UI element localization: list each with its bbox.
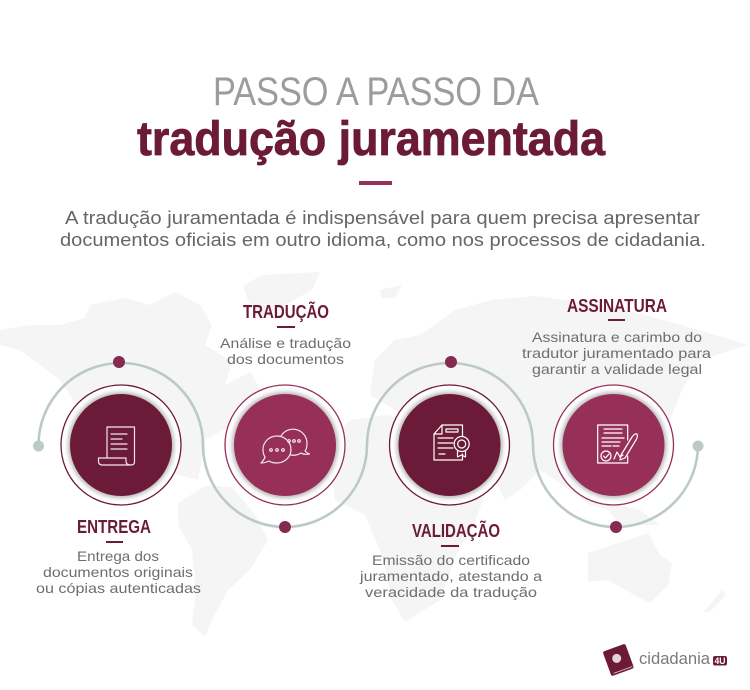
step: entrega: ou cópias autenticadas	[36, 580, 201, 596]
step: validação: veracidade da tradução	[365, 584, 537, 600]
title divider	[359, 181, 392, 185]
step: assinatura: tradutor juramentado para	[522, 345, 711, 361]
icon: signed document with pen	[598, 425, 637, 463]
step 1 circle	[61, 385, 181, 505]
step: entrega: documentos originais	[43, 564, 193, 580]
intro paragraph: documentos oficiais em outro idioma, como nos processos de cidadania.	[60, 230, 706, 250]
step: tradução: Análise e tradução	[220, 335, 351, 351]
step: tradução	[220, 301, 351, 367]
intro paragraph	[60, 208, 706, 250]
icon: scroll document	[98, 427, 134, 465]
title	[137, 70, 605, 166]
step 2 circle	[225, 385, 345, 505]
step 4 circle	[554, 385, 674, 505]
step: entrega	[36, 517, 201, 596]
logo: cidadania4u: 4U	[714, 656, 726, 666]
background world map	[0, 272, 748, 637]
timeline markers	[113, 356, 622, 533]
step: assinatura: garantir a validade legal	[532, 361, 702, 377]
title line 2: tradução juramentada	[137, 113, 605, 166]
timeline start dot	[33, 440, 44, 452]
connecting timeline path	[38, 363, 698, 527]
logo: cidadania4u: cidadania	[639, 649, 711, 668]
intro paragraph: A tradução juramentada é indispensável para quem precisa apresentar	[65, 208, 700, 228]
logo: cidadania4u	[603, 644, 727, 676]
step: entrega: ENTREGA	[77, 517, 151, 537]
icon: passport book	[603, 644, 634, 676]
step: assinatura	[522, 296, 711, 377]
step: validação: VALIDAÇÃO	[412, 520, 500, 541]
step: validação: Emissão do certificado	[372, 552, 530, 568]
timeline end dot	[692, 440, 704, 452]
step 3 circle	[390, 385, 510, 505]
step: validação	[359, 520, 542, 600]
step: assinatura: ASSINATURA	[567, 296, 667, 316]
step: tradução: TRADUÇÃO	[243, 301, 329, 322]
step: entrega: Entrega dos	[77, 548, 159, 564]
step: assinatura: Assinatura e carimbo do	[532, 329, 702, 345]
icon: chat bubbles	[261, 429, 310, 463]
step: tradução: dos documentos	[227, 351, 344, 367]
title line 1: PASSO A PASSO DA	[213, 70, 539, 114]
step: validação: juramentado, atestando a	[359, 568, 542, 584]
icon: certificate with seal	[434, 425, 469, 460]
